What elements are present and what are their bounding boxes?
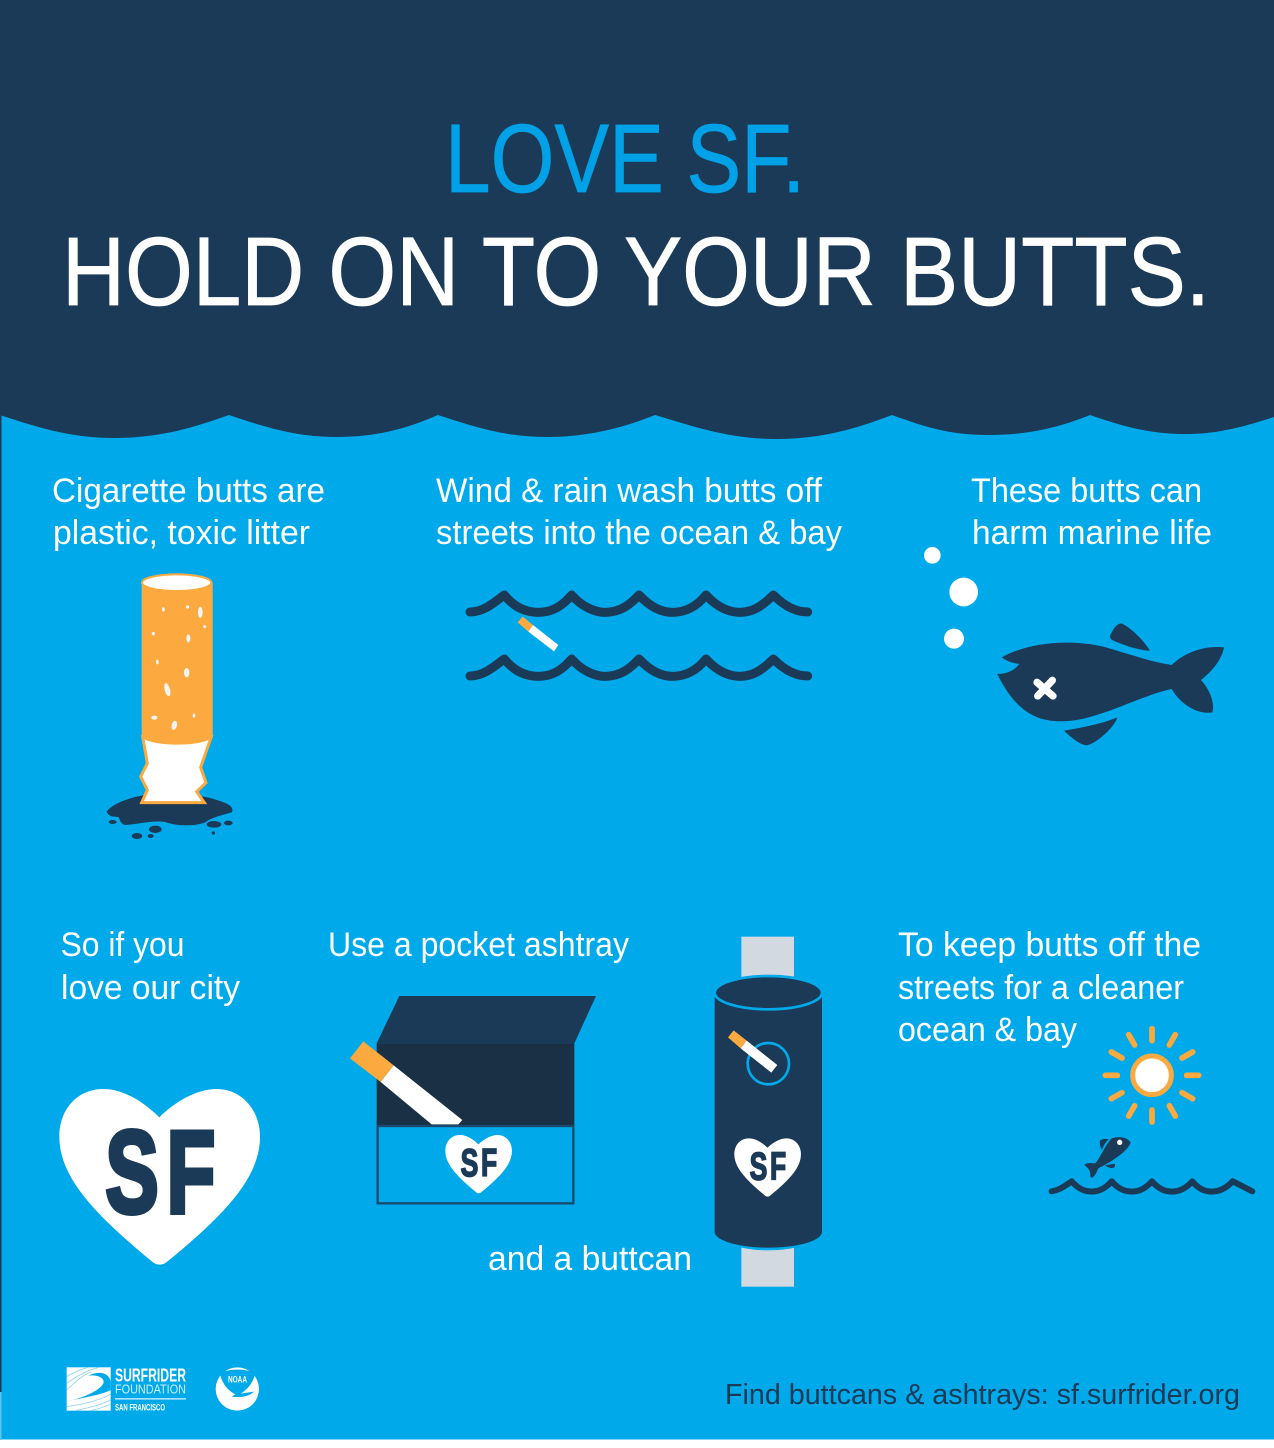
text: so if you love our city: So if you bbox=[60, 926, 184, 964]
text: keep butts off the streets: To keep butts off the bbox=[898, 926, 1201, 964]
text: keep butts off the streets: streets for a cleaner bbox=[898, 969, 1184, 1007]
text: so if you love our city bbox=[60, 926, 240, 1007]
icon: SF heart bbox=[59, 1089, 260, 1265]
icon: cigarette butt with puddle bbox=[107, 574, 233, 839]
icon: sun, leaping fish and wave bbox=[1052, 1029, 1252, 1192]
icon: pocket ashtray: S bbox=[461, 1142, 478, 1185]
text: and a buttcan: and a buttcan bbox=[488, 1240, 692, 1278]
icon: pocket ashtray: F bbox=[481, 1142, 497, 1185]
logo: Surfrider Foundation San Francisco bbox=[67, 1365, 186, 1412]
text: wind and rain: streets into the ocean & bay bbox=[436, 514, 842, 552]
text: cigarette butts are plastic: Cigarette butts are bbox=[52, 472, 325, 510]
icon: SF heart: S bbox=[105, 1107, 159, 1238]
text: harm marine life: These butts can bbox=[971, 472, 1202, 510]
text: cigarette butts are plastic: plastic, toxic litter bbox=[53, 514, 310, 552]
text: harm marine life bbox=[971, 472, 1212, 552]
icon: waves with floating butt bbox=[470, 595, 808, 676]
title: LOVE SF. bbox=[445, 104, 805, 213]
icon: buttcan: S bbox=[750, 1145, 767, 1188]
icon: SF heart: F bbox=[167, 1107, 215, 1238]
logo: Surfrider Foundation San Francisco: SURFRIDER bbox=[115, 1365, 186, 1386]
logo: NOAA: NOAA bbox=[228, 1375, 247, 1385]
text: keep butts off the streets bbox=[898, 926, 1201, 1049]
text: use a pocket ashtray: Use a pocket ashtray bbox=[328, 926, 629, 964]
text: find buttcans and ashtrays: Find buttcans & ashtrays: sf.surfrider.org bbox=[725, 1379, 1240, 1411]
background: ocean bbox=[0, 400, 1274, 1440]
text: so if you love our city: love our city bbox=[61, 969, 240, 1007]
logo: Surfrider Foundation San Francisco: SAN FRANCISCO bbox=[115, 1402, 165, 1412]
icon: buttcan: F bbox=[770, 1145, 786, 1188]
text: harm marine life: harm marine life bbox=[972, 514, 1212, 552]
text: wind and rain: Wind & rain wash butts off bbox=[436, 472, 823, 510]
header band with wavy edge bbox=[0, 0, 1274, 439]
logo: NOAA bbox=[216, 1367, 259, 1411]
text: wind and rain bbox=[436, 472, 842, 552]
icon: pocket ashtray bbox=[350, 996, 596, 1203]
icon: dead fish with bubbles bbox=[924, 547, 1224, 745]
icon: buttcan bbox=[715, 937, 822, 1287]
text: keep butts off the streets: ocean & bay bbox=[898, 1011, 1077, 1049]
text: cigarette butts are plastic bbox=[52, 472, 325, 552]
title bbox=[62, 104, 1210, 326]
logo: Surfrider Foundation San Francisco: FOUNDATION bbox=[115, 1382, 186, 1397]
